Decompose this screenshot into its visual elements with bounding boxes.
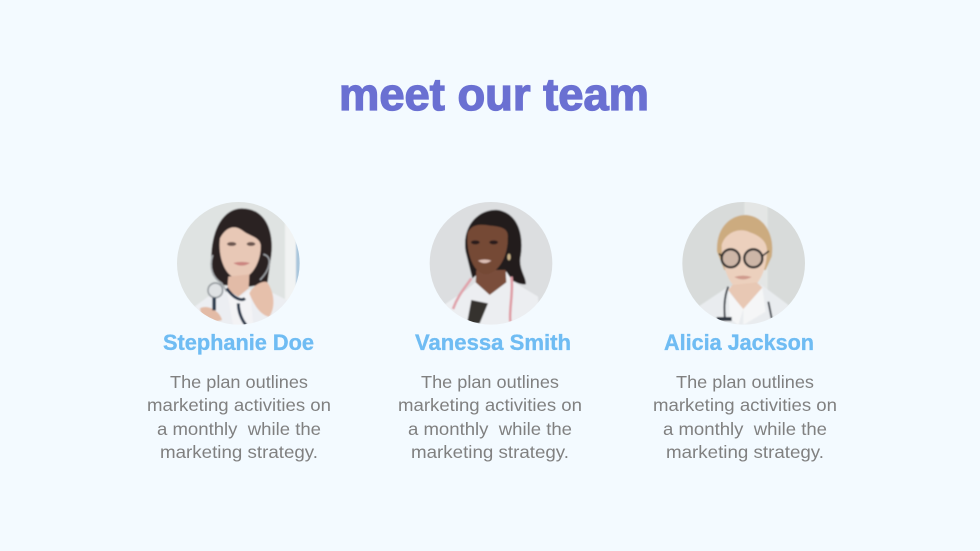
description: Stephanie Doe: marketing activities on [147, 395, 331, 415]
portrait: Alicia Jackson [682, 202, 805, 324]
description: Vanessa Smith: marketing activities on [398, 395, 582, 415]
description: Stephanie Doe: The plan outlines [170, 372, 308, 392]
team member: Stephanie Doe [147, 195, 336, 462]
description: Alicia Jackson: The plan outlines [676, 372, 814, 392]
team member: Vanessa Smith [398, 195, 587, 462]
description: Stephanie Doe: a monthly while the [157, 419, 321, 439]
description: Stephanie Doe: marketing strategy. [160, 442, 318, 462]
description: Vanessa Smith: a monthly while the [408, 419, 572, 439]
description: Alicia Jackson: marketing activities on [653, 395, 837, 415]
description: Alicia Jackson: a monthly while the [663, 419, 827, 439]
portrait: Stephanie Doe [177, 202, 300, 324]
title: meet our team [339, 69, 649, 120]
description: Alicia Jackson: marketing strategy. [666, 442, 824, 462]
team member: Alicia Jackson [653, 195, 842, 462]
name: Vanessa Smith: Vanessa Smith [415, 330, 571, 355]
name: Alicia Jackson: Alicia Jackson [664, 330, 814, 355]
description: Vanessa Smith: The plan outlines [421, 372, 559, 392]
description: Vanessa Smith: marketing strategy. [411, 442, 569, 462]
name: Stephanie Doe: Stephanie Doe [163, 330, 314, 355]
portrait: Vanessa Smith [430, 202, 552, 324]
